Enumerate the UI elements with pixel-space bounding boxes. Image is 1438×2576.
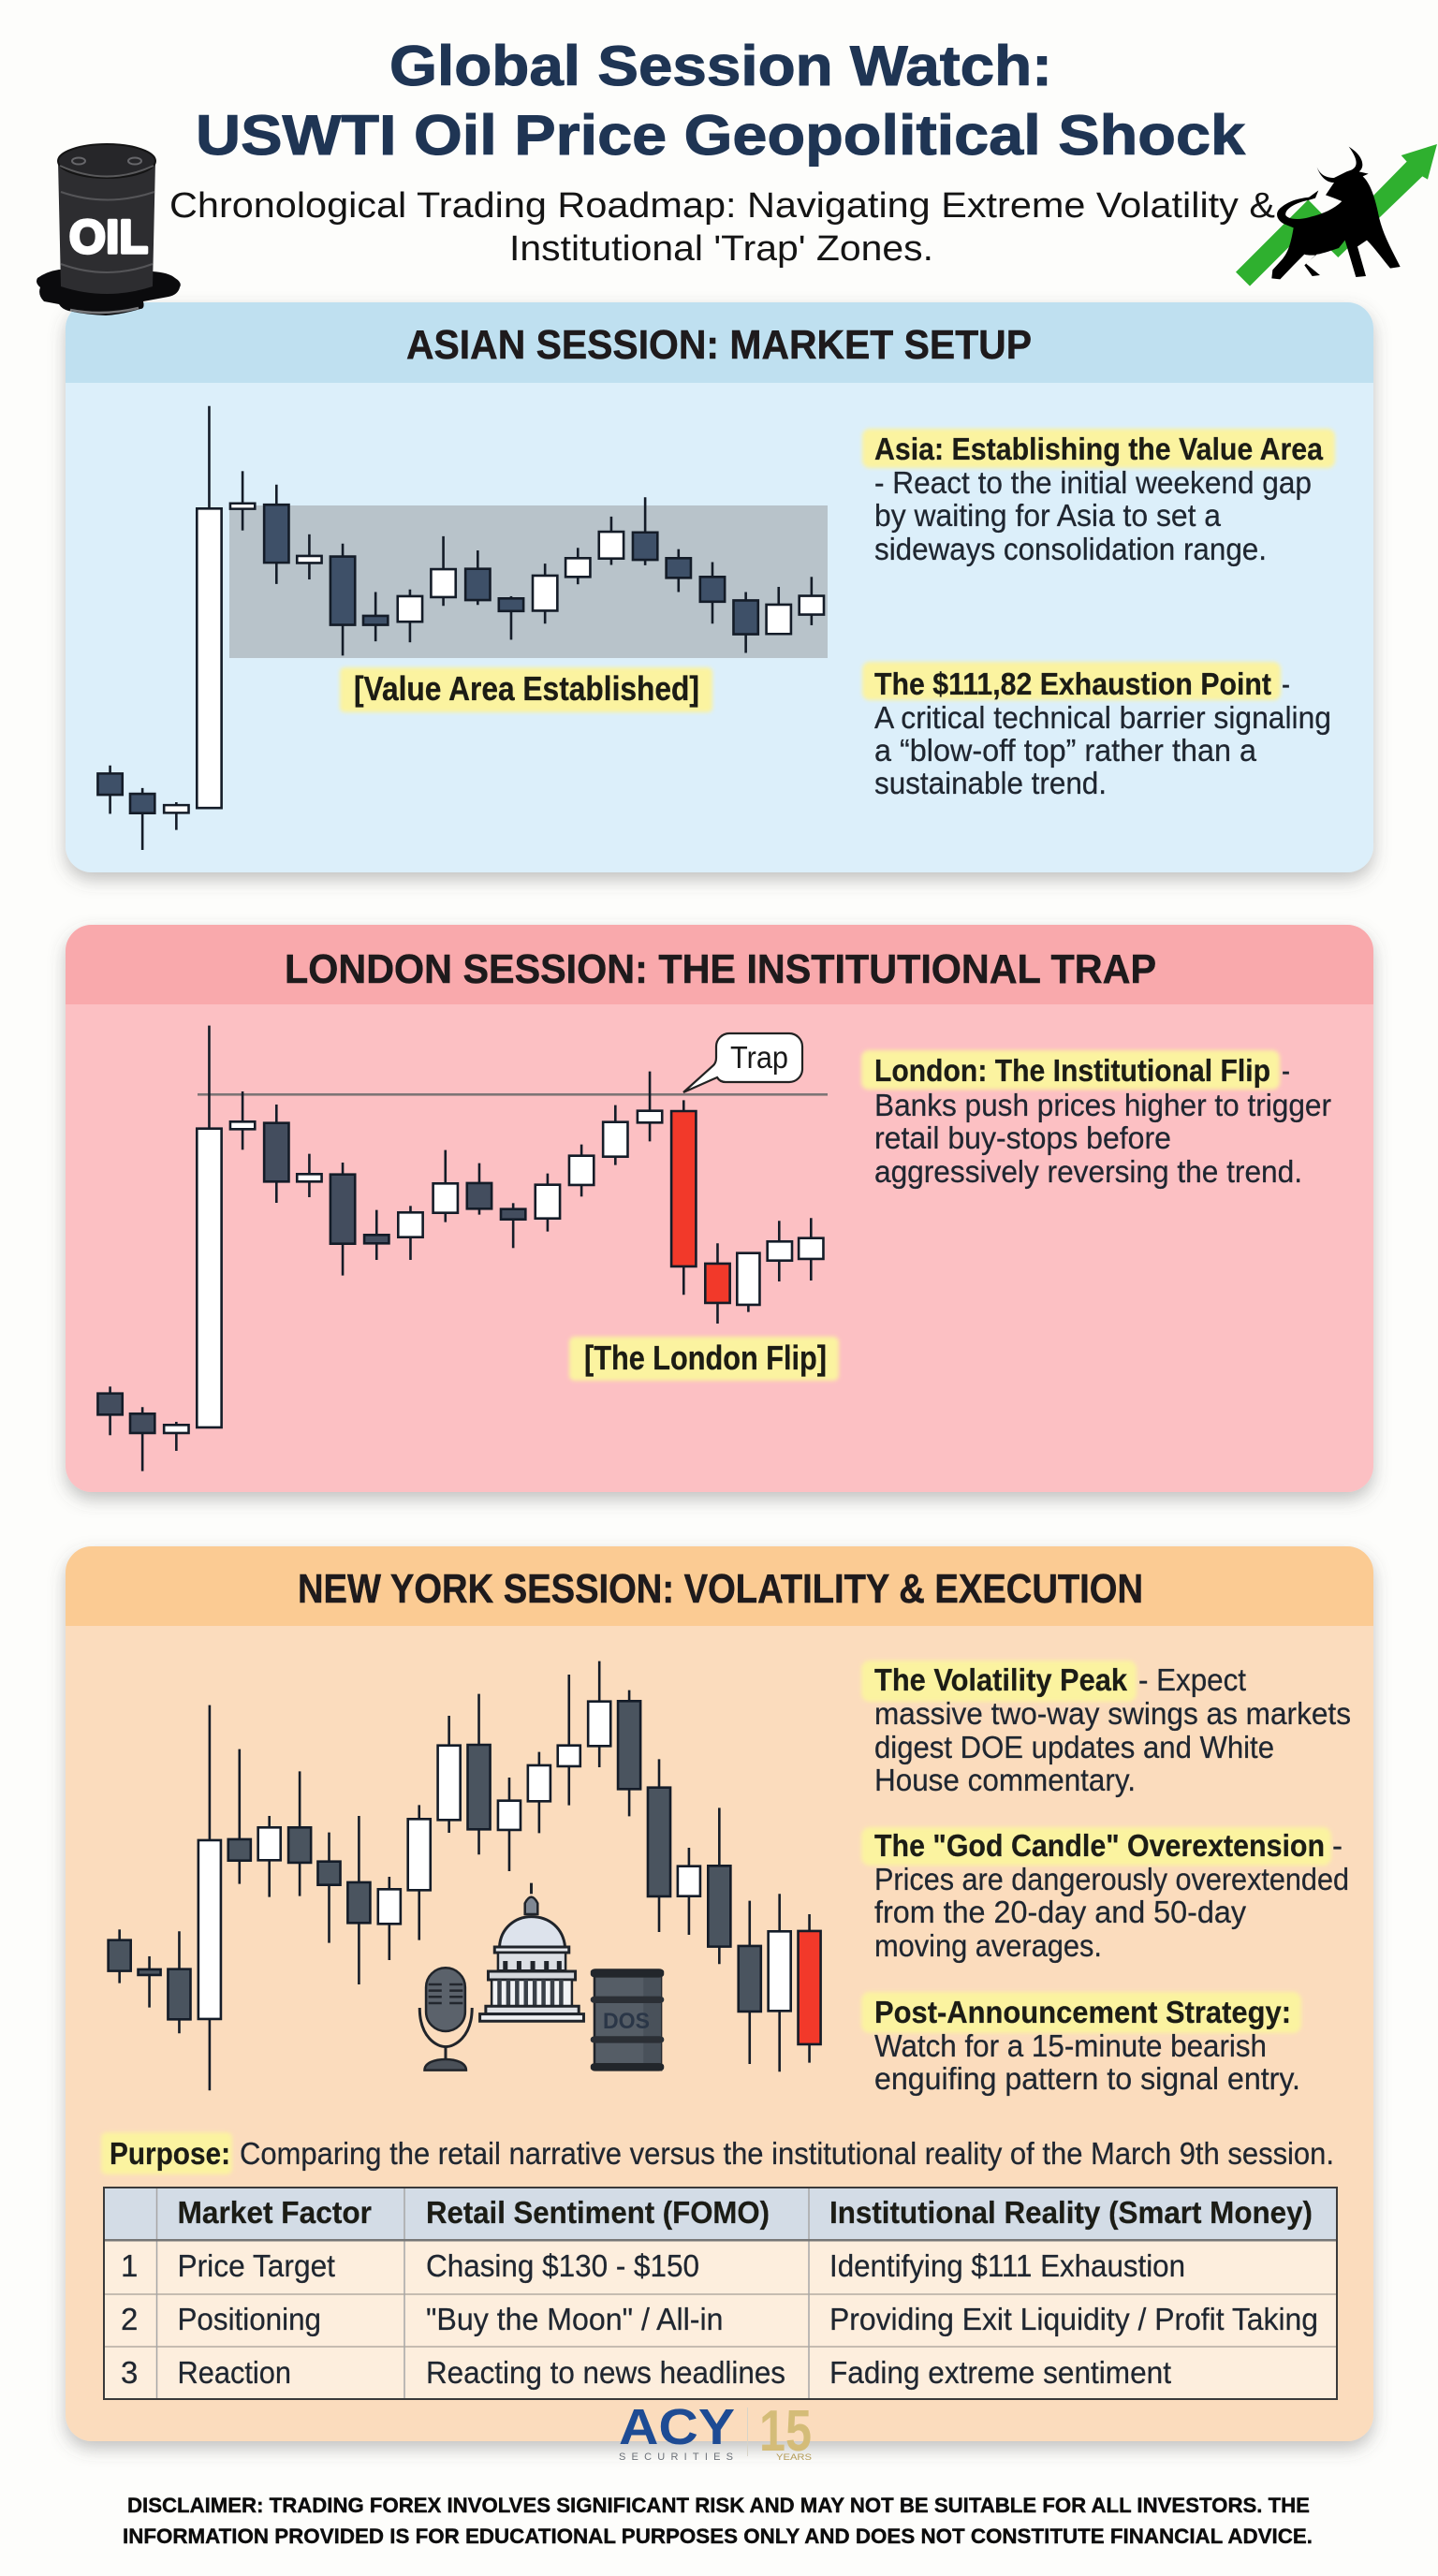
text block: god candle overextension: The "God Candle" Overextension xyxy=(874,1828,1325,1863)
label: value area established: [Value Area Established] xyxy=(354,669,699,708)
callout: trap xyxy=(683,1033,802,1092)
text block: volatility peak: The Volatility Peak xyxy=(874,1662,1128,1697)
icon: bull with green arrow xyxy=(1236,144,1437,286)
text block: post-announcement strategy: Watch for a 15-minute bearish xyxy=(874,2028,1267,2063)
logo: ACY Securities 15 years: YEARS xyxy=(776,2452,812,2462)
text block: exhaustion point: sustainable trend. xyxy=(874,766,1107,800)
value area zone xyxy=(229,505,828,658)
new york panel header band xyxy=(66,1546,1373,1626)
chart: new york session candlesticks xyxy=(109,1661,821,2090)
text block: post-announcement strategy: Post-Announcement Strategy: xyxy=(874,1995,1291,2029)
text block: establishing the value area xyxy=(862,429,1335,566)
bull silhouette xyxy=(1271,147,1401,279)
table background xyxy=(104,2188,1337,2399)
text block: institutional flip: - xyxy=(1282,1053,1290,1088)
purpose statement: Purpose: xyxy=(110,2136,230,2171)
text block: institutional flip: Banks push prices higher to trigger xyxy=(874,1088,1331,1122)
disclaimer: INFORMATION PROVIDED IS FOR EDUCATIONAL PURPOSES ONLY AND DOES NOT CONSTITUTE FINANCIAL ADVICE. xyxy=(123,2525,1313,2548)
table header row: Institutional Reality (Smart Money) xyxy=(829,2195,1313,2230)
green zigzag arrow xyxy=(1236,144,1437,286)
icon: capitol building xyxy=(480,1883,583,2021)
purpose statement: Comparing the retail narrative versus the institutional reality of the March 9th session. xyxy=(240,2136,1334,2171)
text block: volatility peak: massive two-way swings as markets xyxy=(874,1696,1351,1731)
icon: DOS oil barrel xyxy=(591,1969,664,2071)
disclaimer: DISCLAIMER: TRADING FOREX INVOLVES SIGNIFICANT RISK AND MAY NOT BE SUITABLE FOR ALL INVESTORS. THE xyxy=(127,2494,1310,2517)
table row: price target: Price Target xyxy=(178,2248,335,2283)
title xyxy=(196,35,1246,167)
icon: microphone xyxy=(419,1968,472,2071)
label: the london flip: [The London Flip] xyxy=(584,1339,827,1377)
subtitle xyxy=(169,186,1275,269)
trap resistance line xyxy=(198,1093,828,1096)
text block: exhaustion point: a “blow-off top” rather than a xyxy=(874,733,1257,768)
text block: institutional flip: aggressively reversing the trend. xyxy=(874,1154,1302,1189)
table row: price target: Identifying $111 Exhaustion xyxy=(829,2248,1185,2283)
text block: volatility peak: digest DOE updates and White xyxy=(874,1730,1274,1764)
comparison table xyxy=(104,2188,1337,2399)
text block: volatility peak: House commentary. xyxy=(874,1763,1136,1797)
subtitle: Institutional 'Trap' Zones. xyxy=(509,229,933,269)
text block: establishing the value area: Asia: Establishing the Value Area xyxy=(874,432,1324,466)
text block: institutional flip xyxy=(861,1050,1331,1189)
table row: positioning: "Buy the Moon" / All-in xyxy=(426,2302,723,2336)
text block: god candle overextension: Prices are dangerously overextended xyxy=(874,1862,1349,1896)
subtitle: Chronological Trading Roadmap: Navigating Extreme Volatility & xyxy=(169,186,1275,226)
table header row: Retail Sentiment (FOMO) xyxy=(426,2195,770,2230)
panel: london session xyxy=(66,925,1373,1492)
logo: ACY Securities 15 years: ACY xyxy=(619,2399,735,2455)
chart: london session candlesticks xyxy=(97,1026,823,1471)
icon: DOS oil barrel: DOS xyxy=(603,2009,650,2034)
table row: positioning: 2 xyxy=(121,2302,138,2336)
purpose statement xyxy=(101,2132,1334,2174)
table row: reaction: Fading extreme sentiment xyxy=(829,2355,1171,2390)
new york heading: NEW YORK SESSION: VOLATILITY & EXECUTION xyxy=(298,1566,1143,1612)
table header row: Market Factor xyxy=(178,2195,372,2230)
text block: establishing the value area: - React to the initial weekend gap xyxy=(874,465,1312,500)
text block: exhaustion point xyxy=(862,662,1331,800)
logo: ACY Securities 15 years: SECURITIES xyxy=(619,2452,733,2463)
chart: asian session candlesticks xyxy=(97,406,824,850)
title: Global Session Watch: xyxy=(389,35,1052,97)
text block: god candle overextension: - xyxy=(1332,1828,1343,1863)
table row: price target xyxy=(121,2248,1185,2283)
icon: oil barrel with spill: OIL xyxy=(69,211,148,263)
text block: exhaustion point: The $111,82 Exhaustion Point xyxy=(874,666,1271,701)
table row: reaction: 3 xyxy=(121,2355,138,2390)
text block: god candle overextension: moving averages. xyxy=(874,1928,1102,1963)
asian panel header band xyxy=(66,302,1373,383)
asian heading: ASIAN SESSION: MARKET SETUP xyxy=(406,322,1032,368)
table row: reaction xyxy=(121,2355,1171,2390)
table row: reaction: Reacting to news headlines xyxy=(426,2355,785,2390)
new york panel background xyxy=(66,1546,1373,2441)
table row: price target: 1 xyxy=(121,2248,138,2283)
icon: oil barrel with spill xyxy=(37,144,181,315)
logo: ACY Securities 15 years: 15 xyxy=(759,2399,812,2464)
table header row xyxy=(104,2188,1337,2240)
text block: god candle overextension: from the 20-day and 50-day xyxy=(874,1895,1246,1929)
text block: establishing the value area: by waiting for Asia to set a xyxy=(874,498,1222,533)
text block: exhaustion point: - xyxy=(1282,666,1290,701)
text block: institutional flip: London: The Institutional Flip xyxy=(874,1053,1270,1088)
table row: positioning xyxy=(121,2302,1318,2336)
asian panel background xyxy=(66,302,1373,872)
text block: volatility peak xyxy=(861,1661,1351,1797)
callout: trap: Trap xyxy=(730,1040,788,1075)
panel: asian session xyxy=(66,302,1373,872)
table row: reaction: Reaction xyxy=(178,2355,291,2390)
logo: ACY Securities 15 years xyxy=(619,2399,812,2464)
text block: post-announcement strategy: enguifing pattern to signal entry. xyxy=(874,2061,1300,2096)
text block: institutional flip: retail buy-stops before xyxy=(874,1120,1171,1155)
table row: price target: Chasing $130 - $150 xyxy=(426,2248,699,2283)
text block: god candle overextension xyxy=(861,1827,1349,1963)
london panel background xyxy=(66,925,1373,1492)
text block: post-announcement strategy xyxy=(861,1992,1301,2096)
title: USWTI Oil Price Geopolitical Shock xyxy=(196,104,1246,167)
london heading: LONDON SESSION: THE INSTITUTIONAL TRAP xyxy=(285,946,1156,992)
text block: establishing the value area: sideways consolidation range. xyxy=(874,532,1267,566)
table row: positioning: Providing Exit Liquidity / Profit Taking xyxy=(829,2302,1318,2336)
disclaimer xyxy=(123,2494,1313,2548)
panel: new york session xyxy=(66,1546,1373,2441)
table row: positioning: Positioning xyxy=(178,2302,321,2336)
text block: volatility peak: - Expect xyxy=(1138,1662,1246,1697)
text block: exhaustion point: A critical technical barrier signaling xyxy=(874,700,1331,735)
london panel header band xyxy=(66,925,1373,1004)
